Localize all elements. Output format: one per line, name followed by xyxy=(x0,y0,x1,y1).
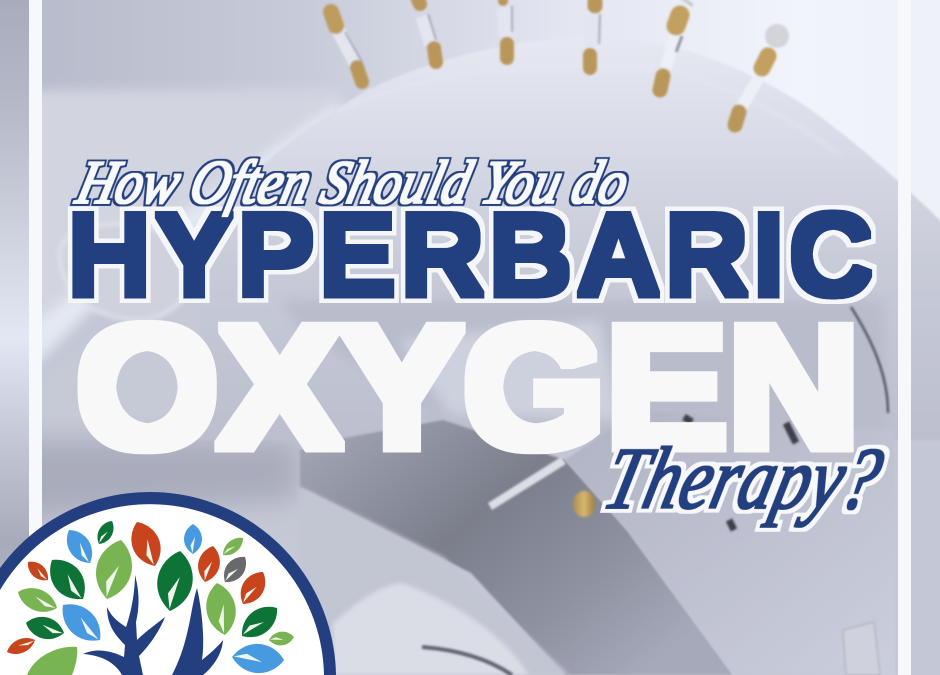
valve 4 xyxy=(590,1,600,68)
heading: OXYGEN: OXYGEN xyxy=(76,289,860,484)
valve 3 xyxy=(503,0,512,58)
heading: HYPERBARIC: HYPERBARIC xyxy=(67,189,873,320)
valve 2 xyxy=(418,0,436,62)
tree trunk and branches xyxy=(83,575,223,675)
left outer strip xyxy=(0,0,29,675)
tree leaves xyxy=(4,517,295,675)
valve 5 xyxy=(660,0,688,90)
dark slots xyxy=(622,403,796,530)
script heading: How Often Should You do: How Often Should You do xyxy=(70,148,636,217)
valve 6 xyxy=(735,24,789,125)
logo navy ring xyxy=(0,492,336,675)
logo badge xyxy=(0,492,336,675)
white bracket tab xyxy=(488,457,566,510)
small connector xyxy=(843,622,880,675)
logo white disc xyxy=(0,504,324,675)
chamber valves xyxy=(331,0,789,125)
brass fitting xyxy=(573,491,595,517)
dark rim arc xyxy=(851,307,888,413)
valve 1 xyxy=(331,12,362,82)
